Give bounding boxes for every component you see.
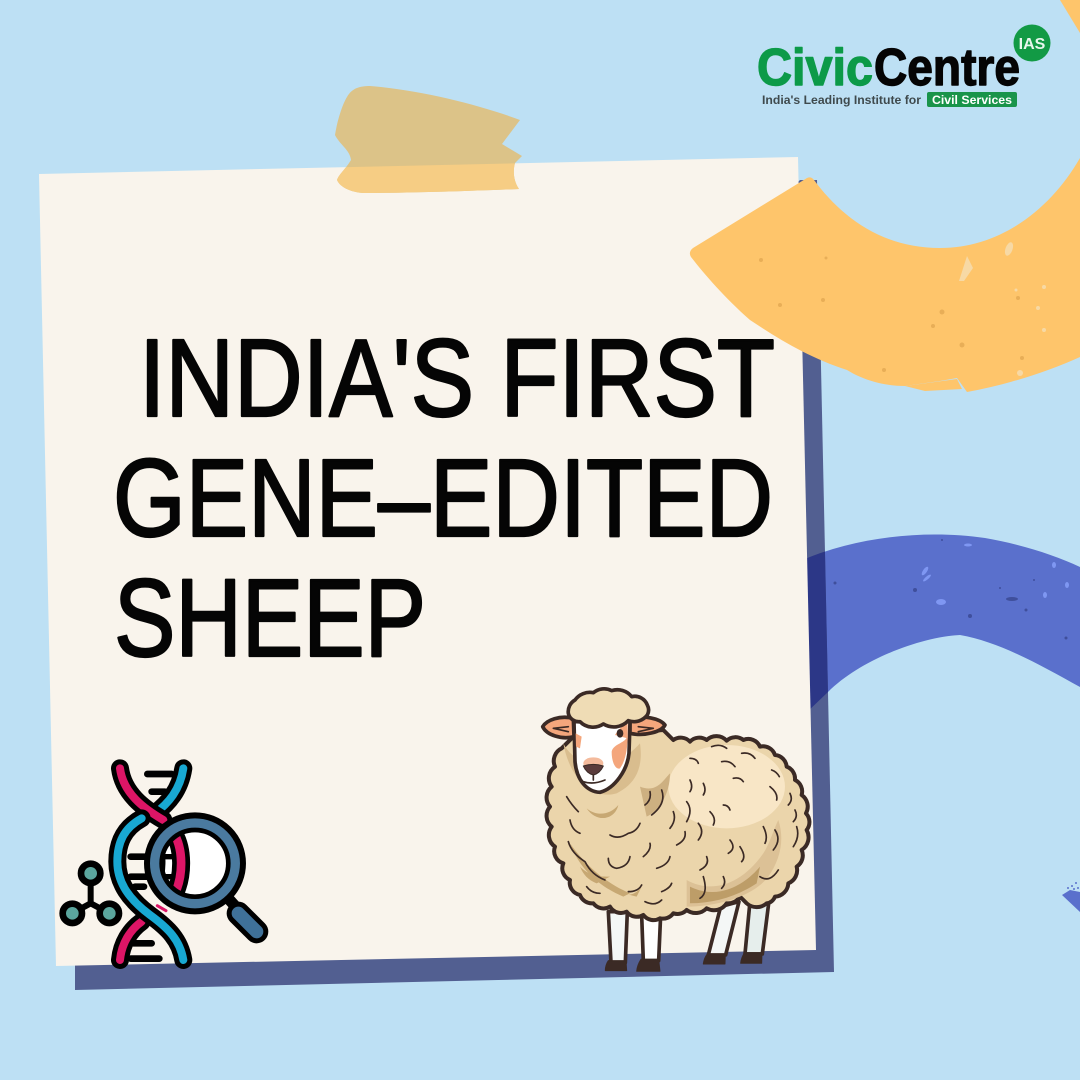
logo: tagline: India's Leading Institute for: [762, 95, 922, 107]
logo: [757, 24, 1050, 107]
logo: wordmark Civic: Civic: [757, 39, 873, 97]
paper shadow: [75, 180, 834, 990]
title line 1: INDIA'S FIRST: [139, 317, 775, 440]
title line 3: SHEEP: [114, 557, 426, 680]
title: [113, 317, 775, 680]
icon: DNA with magnifying glass: [63, 768, 257, 960]
sheep wool curls: [567, 745, 798, 904]
icon: molecule: [63, 864, 119, 923]
logo: IAS badge: IAS: [1019, 36, 1046, 53]
icon: sheep: [543, 689, 809, 971]
icon: magnifying glass: [147, 816, 257, 932]
paper note: [39, 157, 816, 966]
decorative blue brush stroke bottom right: [1062, 882, 1080, 912]
sheep body: [547, 730, 809, 920]
decorative blue arc: [800, 535, 1080, 714]
blue arc seen through shadow: [807, 552, 828, 708]
sheep wool highlights and shading: [563, 743, 785, 907]
sheep legs: [605, 898, 769, 971]
logo: civil services badge: [927, 92, 1017, 107]
tape: [335, 86, 522, 193]
sheep face: [574, 722, 630, 792]
title line 2: GENE–EDITED: [113, 437, 773, 560]
logo: civil services badge: Civil Services: [932, 95, 1012, 107]
logo: IAS badge: [1014, 24, 1050, 62]
icon: DNA helix: [117, 768, 183, 960]
decorative yellow arc: [690, 0, 1080, 392]
sheep ears: [543, 717, 665, 738]
sheep head wool: [568, 689, 649, 727]
logo: wordmark Centre: Centre: [874, 39, 1020, 97]
